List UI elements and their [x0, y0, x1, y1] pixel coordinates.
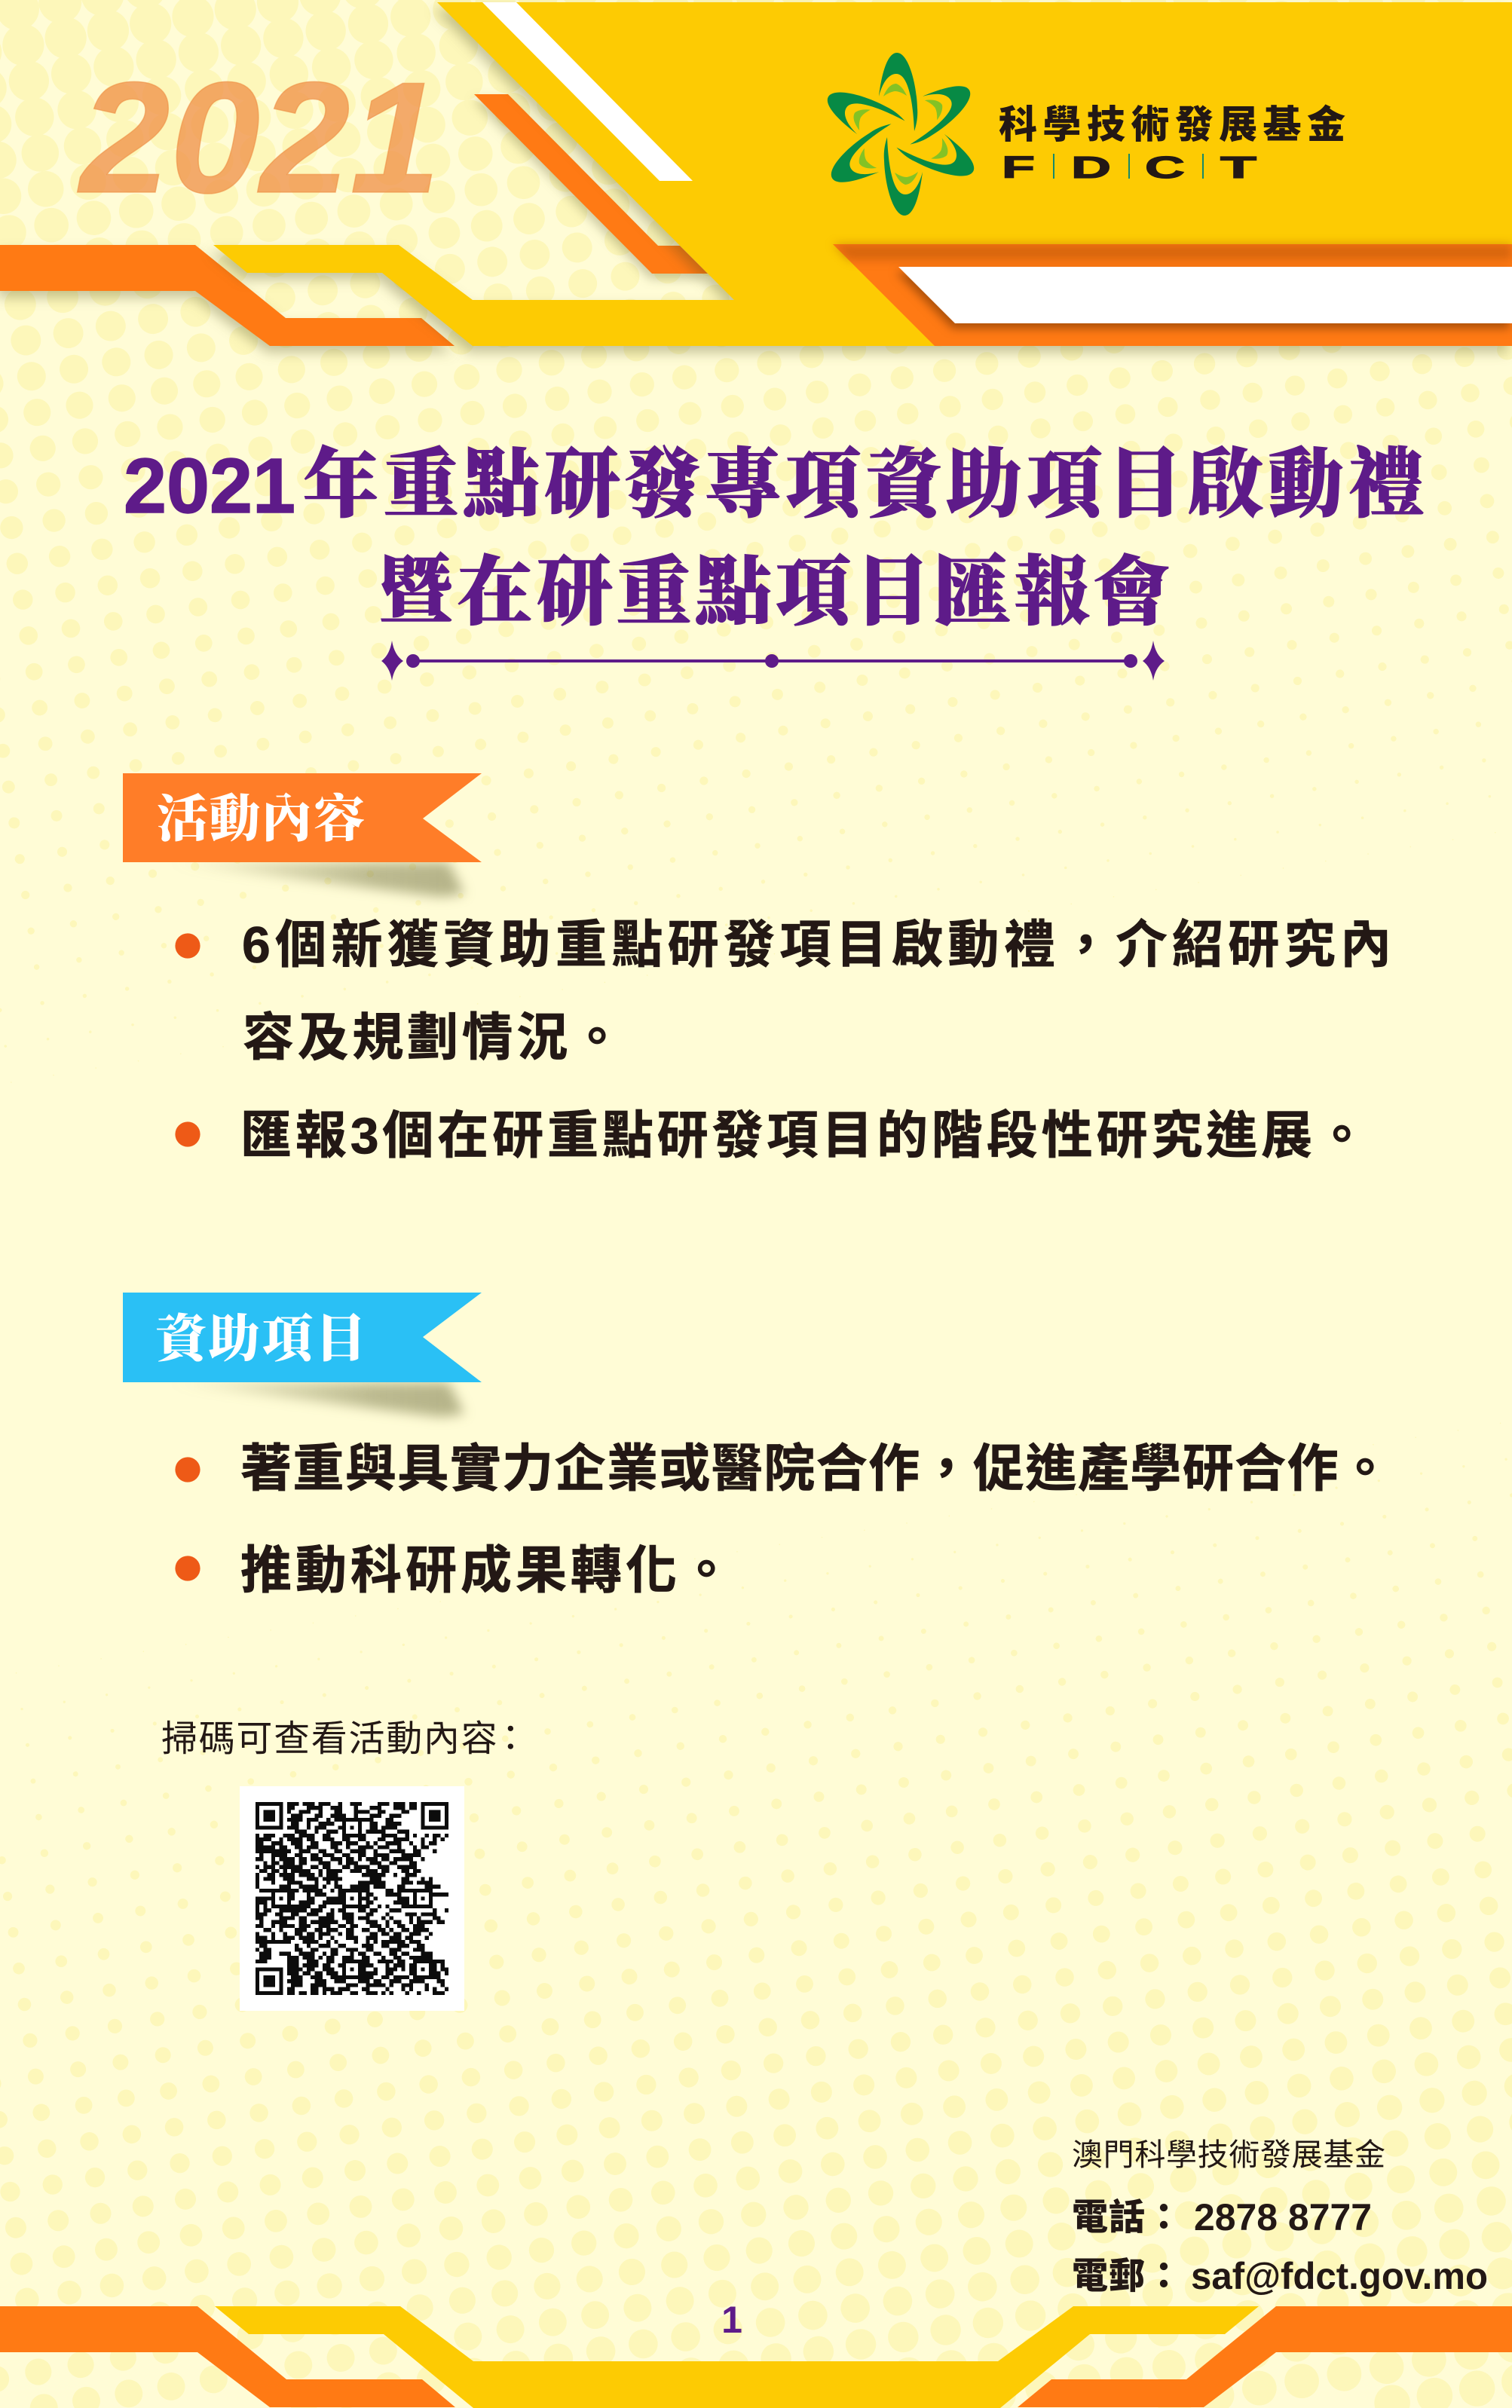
white band right	[898, 267, 1512, 323]
bullet 1	[175, 933, 200, 959]
FDCT wordmark	[1002, 150, 1256, 185]
footer orange left	[0, 2306, 455, 2407]
footer yellow centre	[215, 2306, 1259, 2408]
FDCT wordmark: C	[1145, 150, 1185, 185]
white diagonal strip	[482, 2, 693, 181]
organisation name: 科學技術發展基金	[999, 103, 1345, 146]
page number: 1	[721, 2299, 742, 2341]
footer ribbons	[0, 2306, 1512, 2408]
FDCT wordmark: D	[1071, 150, 1111, 185]
bullet text 2: 匯報3個在研重點研發項目的階段性研究進展。	[240, 1107, 1367, 1164]
telephone label: 電話：	[1072, 2198, 1183, 2238]
section tag: funding: 資助項目	[155, 1311, 366, 1368]
title line 2: 暨在研重點項目匯報會	[378, 550, 1169, 635]
orange left ribbon	[0, 245, 455, 346]
email address: saf@fdct.gov.mo	[1191, 2255, 1488, 2297]
telephone number: 2878 8777	[1194, 2196, 1372, 2238]
activity list	[175, 916, 1391, 1164]
foundation name: 澳門科學技術發展基金	[1072, 2137, 1385, 2172]
bullet text 1 continued: 容及規劃情況。	[243, 1009, 623, 1066]
bullet 4	[175, 1556, 200, 1581]
email label: 電郵：	[1072, 2257, 1183, 2296]
section tag: activity	[123, 773, 482, 897]
FDCT wordmark: T	[1220, 150, 1256, 185]
FDCT wordmark: F	[1002, 150, 1035, 185]
title line 1: 年重點研發專項資助項目啟動禮	[303, 442, 1424, 527]
orange band right	[833, 244, 1512, 346]
bullet text 1: 6個新獲資助重點研發項目啟動禮，介紹研究內	[242, 916, 1391, 974]
yellow main banner	[213, 2, 1512, 346]
bullet 2	[175, 1121, 200, 1147]
section tag: activity: 活動內容	[157, 791, 365, 848]
bullet text 3: 著重與具實力企業或醫院合作，促進產學研合作。	[240, 1440, 1391, 1498]
header banner	[0, 2, 1512, 346]
bullet text 4: 推動科研成果轉化。	[240, 1542, 732, 1599]
section tag: funding	[123, 1293, 482, 1417]
FDCT logo mark	[819, 53, 982, 216]
QR code	[240, 1786, 464, 2011]
main title	[124, 442, 1424, 681]
QR caption: 掃碼可查看活動內容：	[161, 1719, 530, 1759]
title line 1: 2021	[124, 442, 295, 529]
year 2021: 2021	[77, 49, 440, 226]
title ornament	[381, 641, 1165, 681]
orange diagonal strip	[474, 94, 708, 274]
contact block	[1072, 2137, 1488, 2297]
bullet 3	[175, 1457, 200, 1482]
funding list	[175, 1440, 1391, 1599]
footer orange right	[1018, 2306, 1512, 2407]
